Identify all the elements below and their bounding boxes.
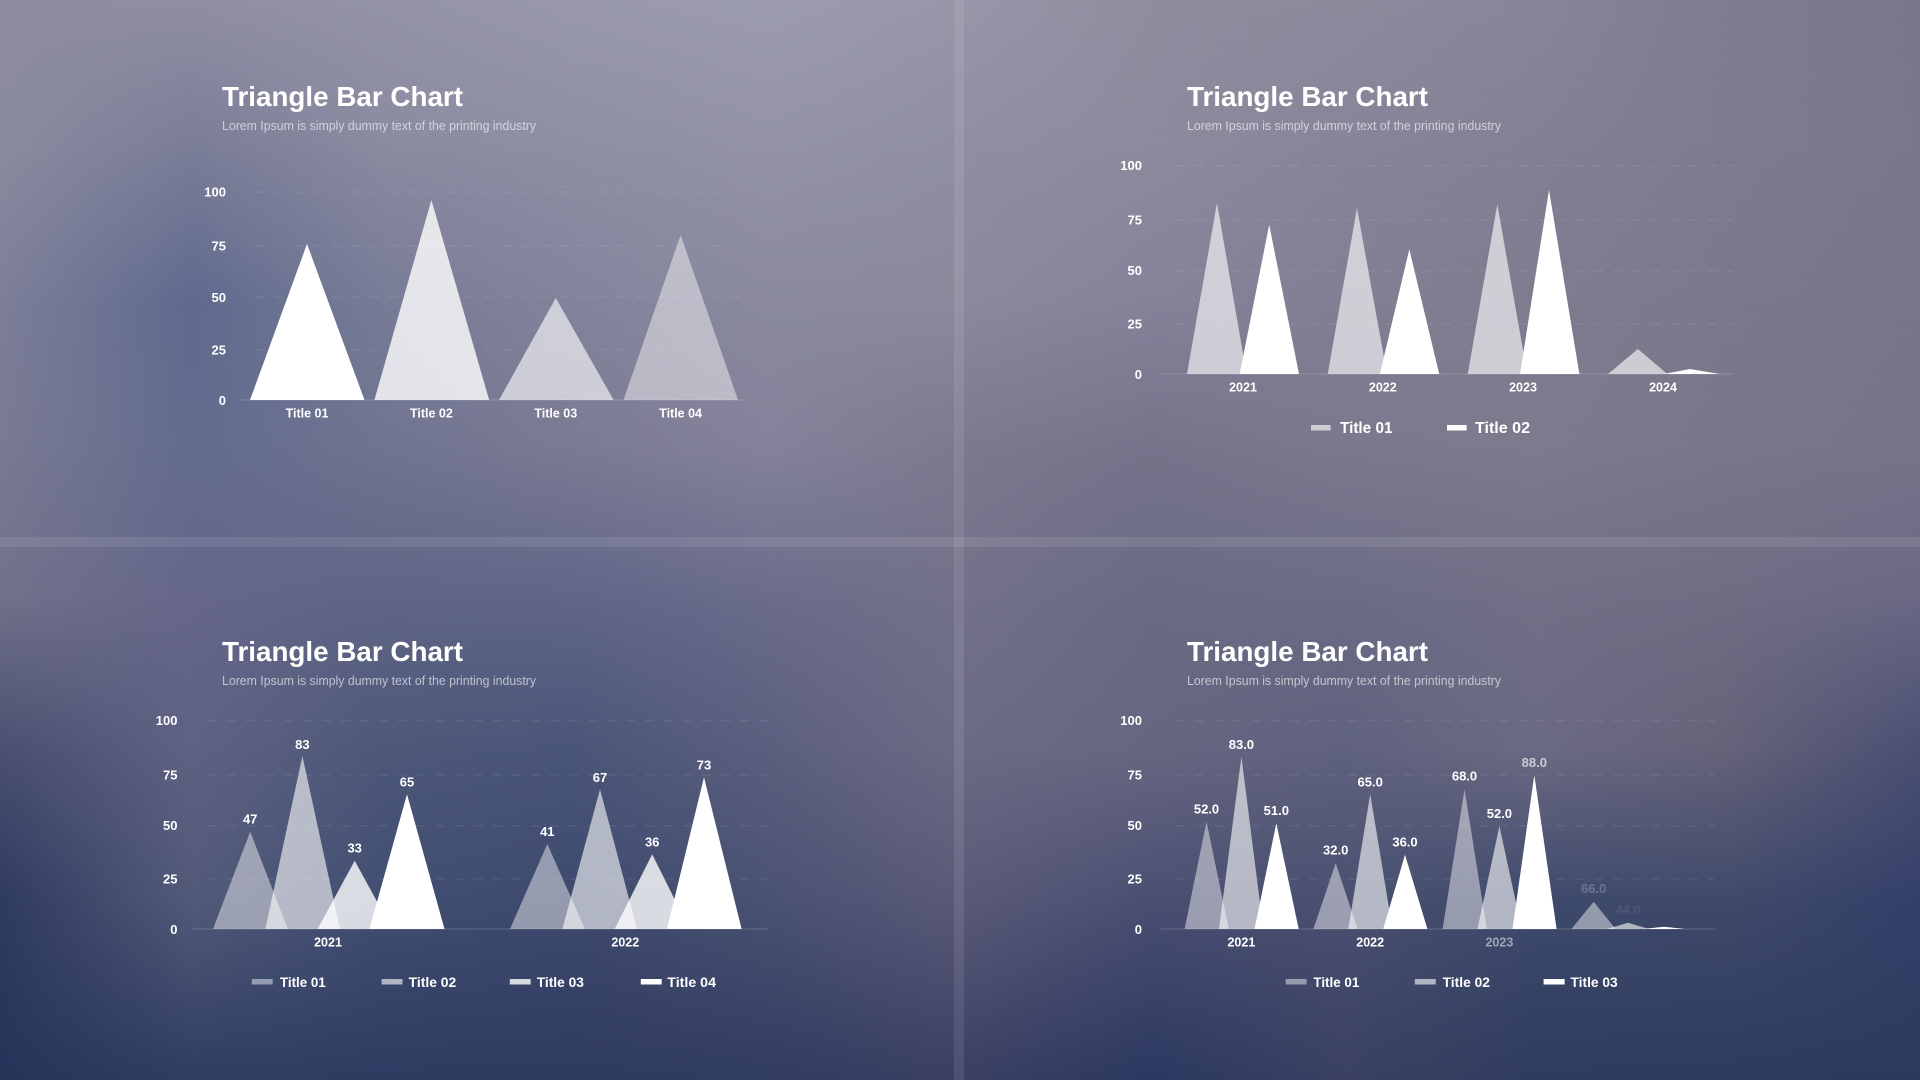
category labels xyxy=(1229,380,1677,394)
y axis labels xyxy=(156,713,178,937)
bar: 2024 Title 02 xyxy=(1664,369,1720,374)
bar: 2022 Title 01: 41 xyxy=(540,824,555,839)
category labels: 2022 xyxy=(1356,936,1384,950)
bar: 2021 Title 03 xyxy=(1254,803,1299,929)
y axis labels: 75 xyxy=(1128,212,1142,228)
bar: 2022 Title 01 xyxy=(1328,208,1387,374)
legend: Title 01 xyxy=(280,974,326,990)
y axis labels: 0 xyxy=(1135,367,1142,382)
bar: 2022 Title 03: 36 xyxy=(645,834,659,849)
bar: 2021 Title 02: 83 xyxy=(295,737,310,752)
category labels: 2021 xyxy=(1227,936,1255,950)
category labels: 2024 xyxy=(1649,380,1677,394)
y axis labels: 0 xyxy=(1135,922,1142,937)
y axis labels: 25 xyxy=(1128,316,1142,332)
bar: 2022 Title 01: 32.0 xyxy=(1323,842,1348,857)
legend xyxy=(1311,420,1530,437)
bar: 2021 Title 01: 47 xyxy=(243,811,257,826)
y axis labels xyxy=(1120,158,1142,382)
legend: Title 04 xyxy=(667,974,716,990)
triangle bar chart xyxy=(1187,190,1720,374)
bar: 2023 Title 02: 52.0 xyxy=(1487,806,1512,821)
panel: top-left chart xyxy=(204,81,746,420)
category labels: 2021 xyxy=(314,936,342,950)
panel: top-right chart xyxy=(1120,81,1733,437)
heading: Triangle Bar Chart xyxy=(222,81,463,112)
horizontal divider band xyxy=(0,537,1920,547)
bar: 2022 Title 03: 36.0 xyxy=(1392,834,1418,849)
bar: Title 02 xyxy=(374,200,489,400)
y axis labels: 50 xyxy=(1128,818,1142,833)
bar: 2023 Title 03: 88.0 xyxy=(1522,755,1547,770)
bar: 2022 Title 03 xyxy=(615,834,689,929)
bar: 2024 Title 02: 44.0 xyxy=(1615,902,1641,917)
bar: 2024 Title 01: 66.0 xyxy=(1581,881,1606,896)
bar: 2022 Title 04: 73 xyxy=(697,758,711,773)
y axis labels: 50 xyxy=(163,818,178,833)
category labels: 2023 xyxy=(1485,936,1513,950)
y axis labels: 25 xyxy=(1128,872,1142,886)
bar: 2021 Title 03: 33 xyxy=(347,840,362,855)
bar: 2022 Title 01 xyxy=(510,824,585,929)
subheading: Lorem Ipsum is simply dummy text of the printing industry xyxy=(222,674,537,688)
bar: Title 01 xyxy=(250,244,364,400)
y axis labels: 0 xyxy=(170,922,178,937)
bar: 2023 Title 01 xyxy=(1443,769,1487,929)
legend: Title 01 xyxy=(1313,974,1359,990)
bar: 2021 Title 01: 52.0 xyxy=(1194,801,1219,816)
panel: bottom-left chart xyxy=(156,636,768,990)
triangle bar chart xyxy=(1185,737,1685,929)
bar: 2022 Title 02: 67 xyxy=(593,770,607,785)
y axis labels: 75 xyxy=(163,768,178,782)
bar: 2021 Title 04: 65 xyxy=(400,774,414,789)
bar: 2023 Title 02 xyxy=(1478,806,1522,929)
subheading: Lorem Ipsum is simply dummy text of the printing industry xyxy=(1187,674,1502,688)
heading: Triangle Bar Chart xyxy=(1187,81,1428,112)
bar: 2022 Title 03 xyxy=(1383,834,1427,929)
bar: 2021 Title 03: 51.0 xyxy=(1264,803,1289,818)
category labels xyxy=(314,936,639,950)
legend xyxy=(252,974,716,990)
triangle bar chart xyxy=(250,200,738,400)
category labels: 2023 xyxy=(1509,380,1537,394)
category labels xyxy=(1227,936,1513,950)
y axis labels: 25 xyxy=(163,872,178,886)
y axis labels xyxy=(204,184,226,408)
bar: 2023 Title 03 xyxy=(1512,755,1557,929)
bar: Title 03 xyxy=(499,298,614,400)
bar: 2023 Title 01 xyxy=(1468,204,1527,374)
heading: Triangle Bar Chart xyxy=(222,636,463,667)
bar: 2021 Title 03 xyxy=(318,840,392,929)
bar: 2024 Title 01 xyxy=(1608,349,1667,374)
bar: 2022 Title 02 xyxy=(1380,249,1439,374)
bar: 2021 Title 04 xyxy=(369,774,444,929)
category labels: 2021 xyxy=(1229,380,1257,394)
bar: 2021 Title 01 xyxy=(213,811,288,929)
y axis labels: 100 xyxy=(204,184,226,200)
bar: Title 04 xyxy=(624,235,738,400)
y axis labels: 50 xyxy=(212,290,226,305)
bar: 2022 Title 02 xyxy=(562,770,637,929)
legend: Title 03 xyxy=(1570,974,1618,990)
category labels: Title 01 xyxy=(286,406,328,420)
heading: Triangle Bar Chart xyxy=(1187,636,1428,667)
category labels: Title 03 xyxy=(534,406,577,420)
category labels: 2022 xyxy=(611,936,639,950)
category labels: Title 02 xyxy=(410,406,453,420)
legend: Title 03 xyxy=(537,974,584,990)
bar: 2022 Title 02: 65.0 xyxy=(1358,774,1383,789)
triangle bar chart xyxy=(213,737,742,929)
legend xyxy=(1286,974,1618,990)
bar: 2021 Title 02 xyxy=(265,737,340,929)
legend: Title 02 xyxy=(409,974,457,990)
y axis labels xyxy=(1120,713,1142,937)
bar: 2021 Title 02 xyxy=(1219,737,1263,929)
bar: 2022 Title 04 xyxy=(667,758,742,929)
y axis labels: 100 xyxy=(1120,158,1142,173)
bar: 2023 Title 02 xyxy=(1520,190,1579,374)
bar: 2021 Title 02 xyxy=(1240,225,1299,374)
y axis labels: 0 xyxy=(219,393,226,408)
y axis labels: 100 xyxy=(1120,713,1142,728)
bar: 2024 Title 03 xyxy=(1643,927,1685,929)
y axis labels: 100 xyxy=(156,713,178,728)
y axis labels: 75 xyxy=(1128,768,1142,782)
subheading: Lorem Ipsum is simply dummy text of the printing industry xyxy=(1187,119,1502,133)
bar: 2021 Title 01 xyxy=(1187,203,1246,374)
legend: Title 01 xyxy=(1340,420,1393,437)
y axis labels: 75 xyxy=(212,238,226,254)
subheading: Lorem Ipsum is simply dummy text of the printing industry xyxy=(222,119,537,133)
bar: 2023 Title 01: 68.0 xyxy=(1452,769,1477,784)
bar: 2024 Title 01 xyxy=(1571,881,1616,929)
category labels: 2022 xyxy=(1369,380,1397,394)
legend: Title 02 xyxy=(1475,420,1530,437)
legend: Title 02 xyxy=(1443,974,1490,990)
y axis labels: 50 xyxy=(1128,263,1142,278)
panel: bottom-right chart xyxy=(1120,636,1715,990)
bar: 2022 Title 02 xyxy=(1348,774,1392,929)
bar: 2022 Title 01 xyxy=(1313,842,1358,929)
y axis labels: 25 xyxy=(212,342,226,358)
category labels: Title 04 xyxy=(659,406,702,420)
bar: 2024 Title 02 xyxy=(1607,902,1649,929)
bar: 2021 Title 02: 83.0 xyxy=(1229,737,1254,752)
bar: 2021 Title 01 xyxy=(1185,801,1229,929)
category labels xyxy=(286,406,702,420)
vertical divider band xyxy=(954,0,964,1080)
